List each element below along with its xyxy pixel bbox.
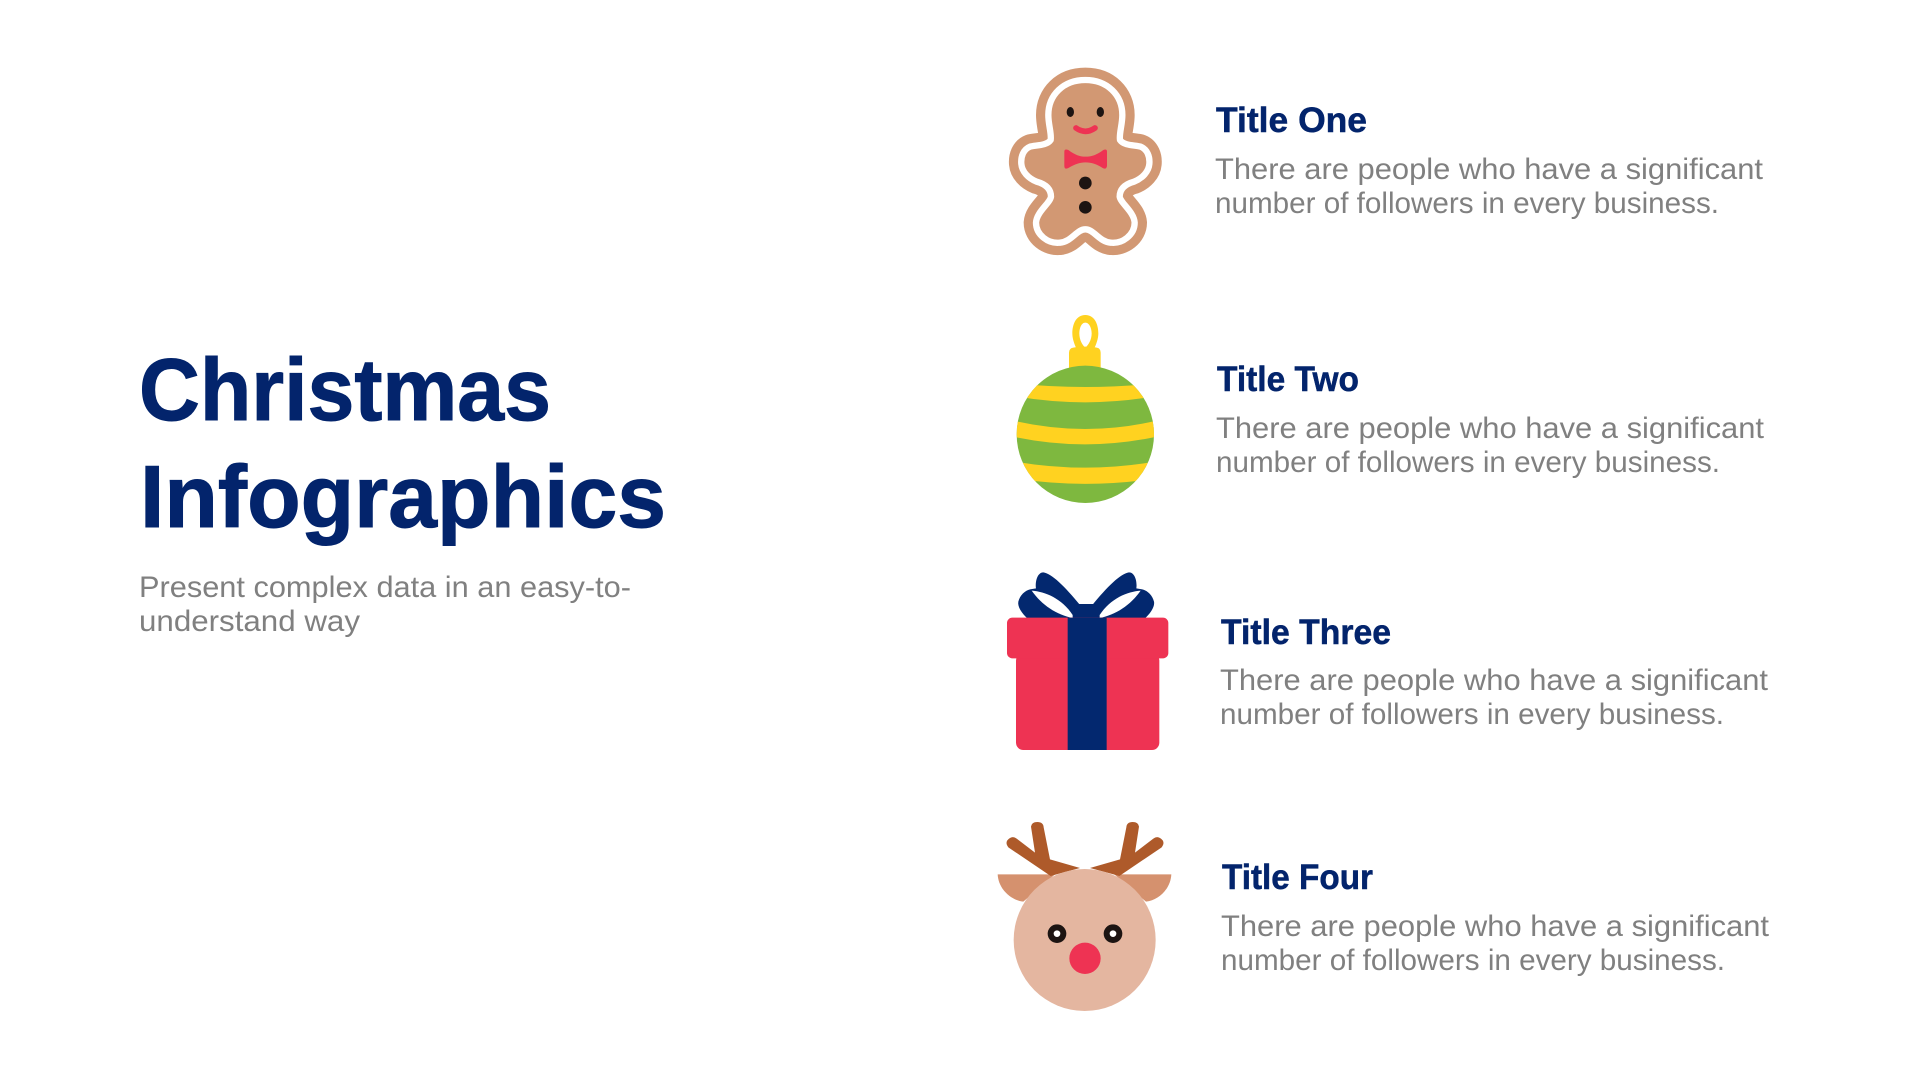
description: title four: There are people who have a significant [1221, 910, 1770, 943]
panel: item two [1013, 315, 1765, 503]
heading: title three: Title Three [1221, 613, 1391, 652]
icon: gingerbread man [1021, 80, 1149, 243]
icon: reindeer [998, 822, 1171, 1011]
panel: item one [1021, 80, 1764, 243]
heading: title four: Title Four [1222, 858, 1373, 897]
panel: item four [998, 822, 1770, 1011]
description: title three: There are people who have a significant [1220, 664, 1769, 697]
description: title three [1220, 664, 1769, 731]
description: title four [1221, 910, 1770, 977]
subtitle text: Present complex data in an easy-to- [139, 571, 631, 604]
title [139, 340, 666, 546]
description: title one: There are people who have a significant [1215, 153, 1764, 186]
description: title one [1215, 153, 1764, 220]
title: Infographics [140, 447, 666, 546]
subtitle text: understand way [139, 605, 360, 638]
description: title one: number of followers in every business. [1215, 187, 1719, 220]
subtitle text [139, 571, 631, 638]
description: title four: number of followers in every business. [1221, 944, 1725, 977]
panel: item three [1007, 572, 1769, 750]
description: title two: number of followers in every business. [1216, 446, 1720, 479]
description: title two: There are people who have a significant [1216, 412, 1765, 445]
heading: title one: Title One [1216, 101, 1367, 140]
icon: gift box [1007, 572, 1168, 750]
title: Christmas [139, 340, 551, 439]
icon: striped bauble [1013, 315, 1157, 503]
heading: title two: Title Two [1217, 360, 1359, 399]
description: title three: number of followers in every business. [1220, 698, 1724, 731]
description: title two [1216, 412, 1765, 479]
